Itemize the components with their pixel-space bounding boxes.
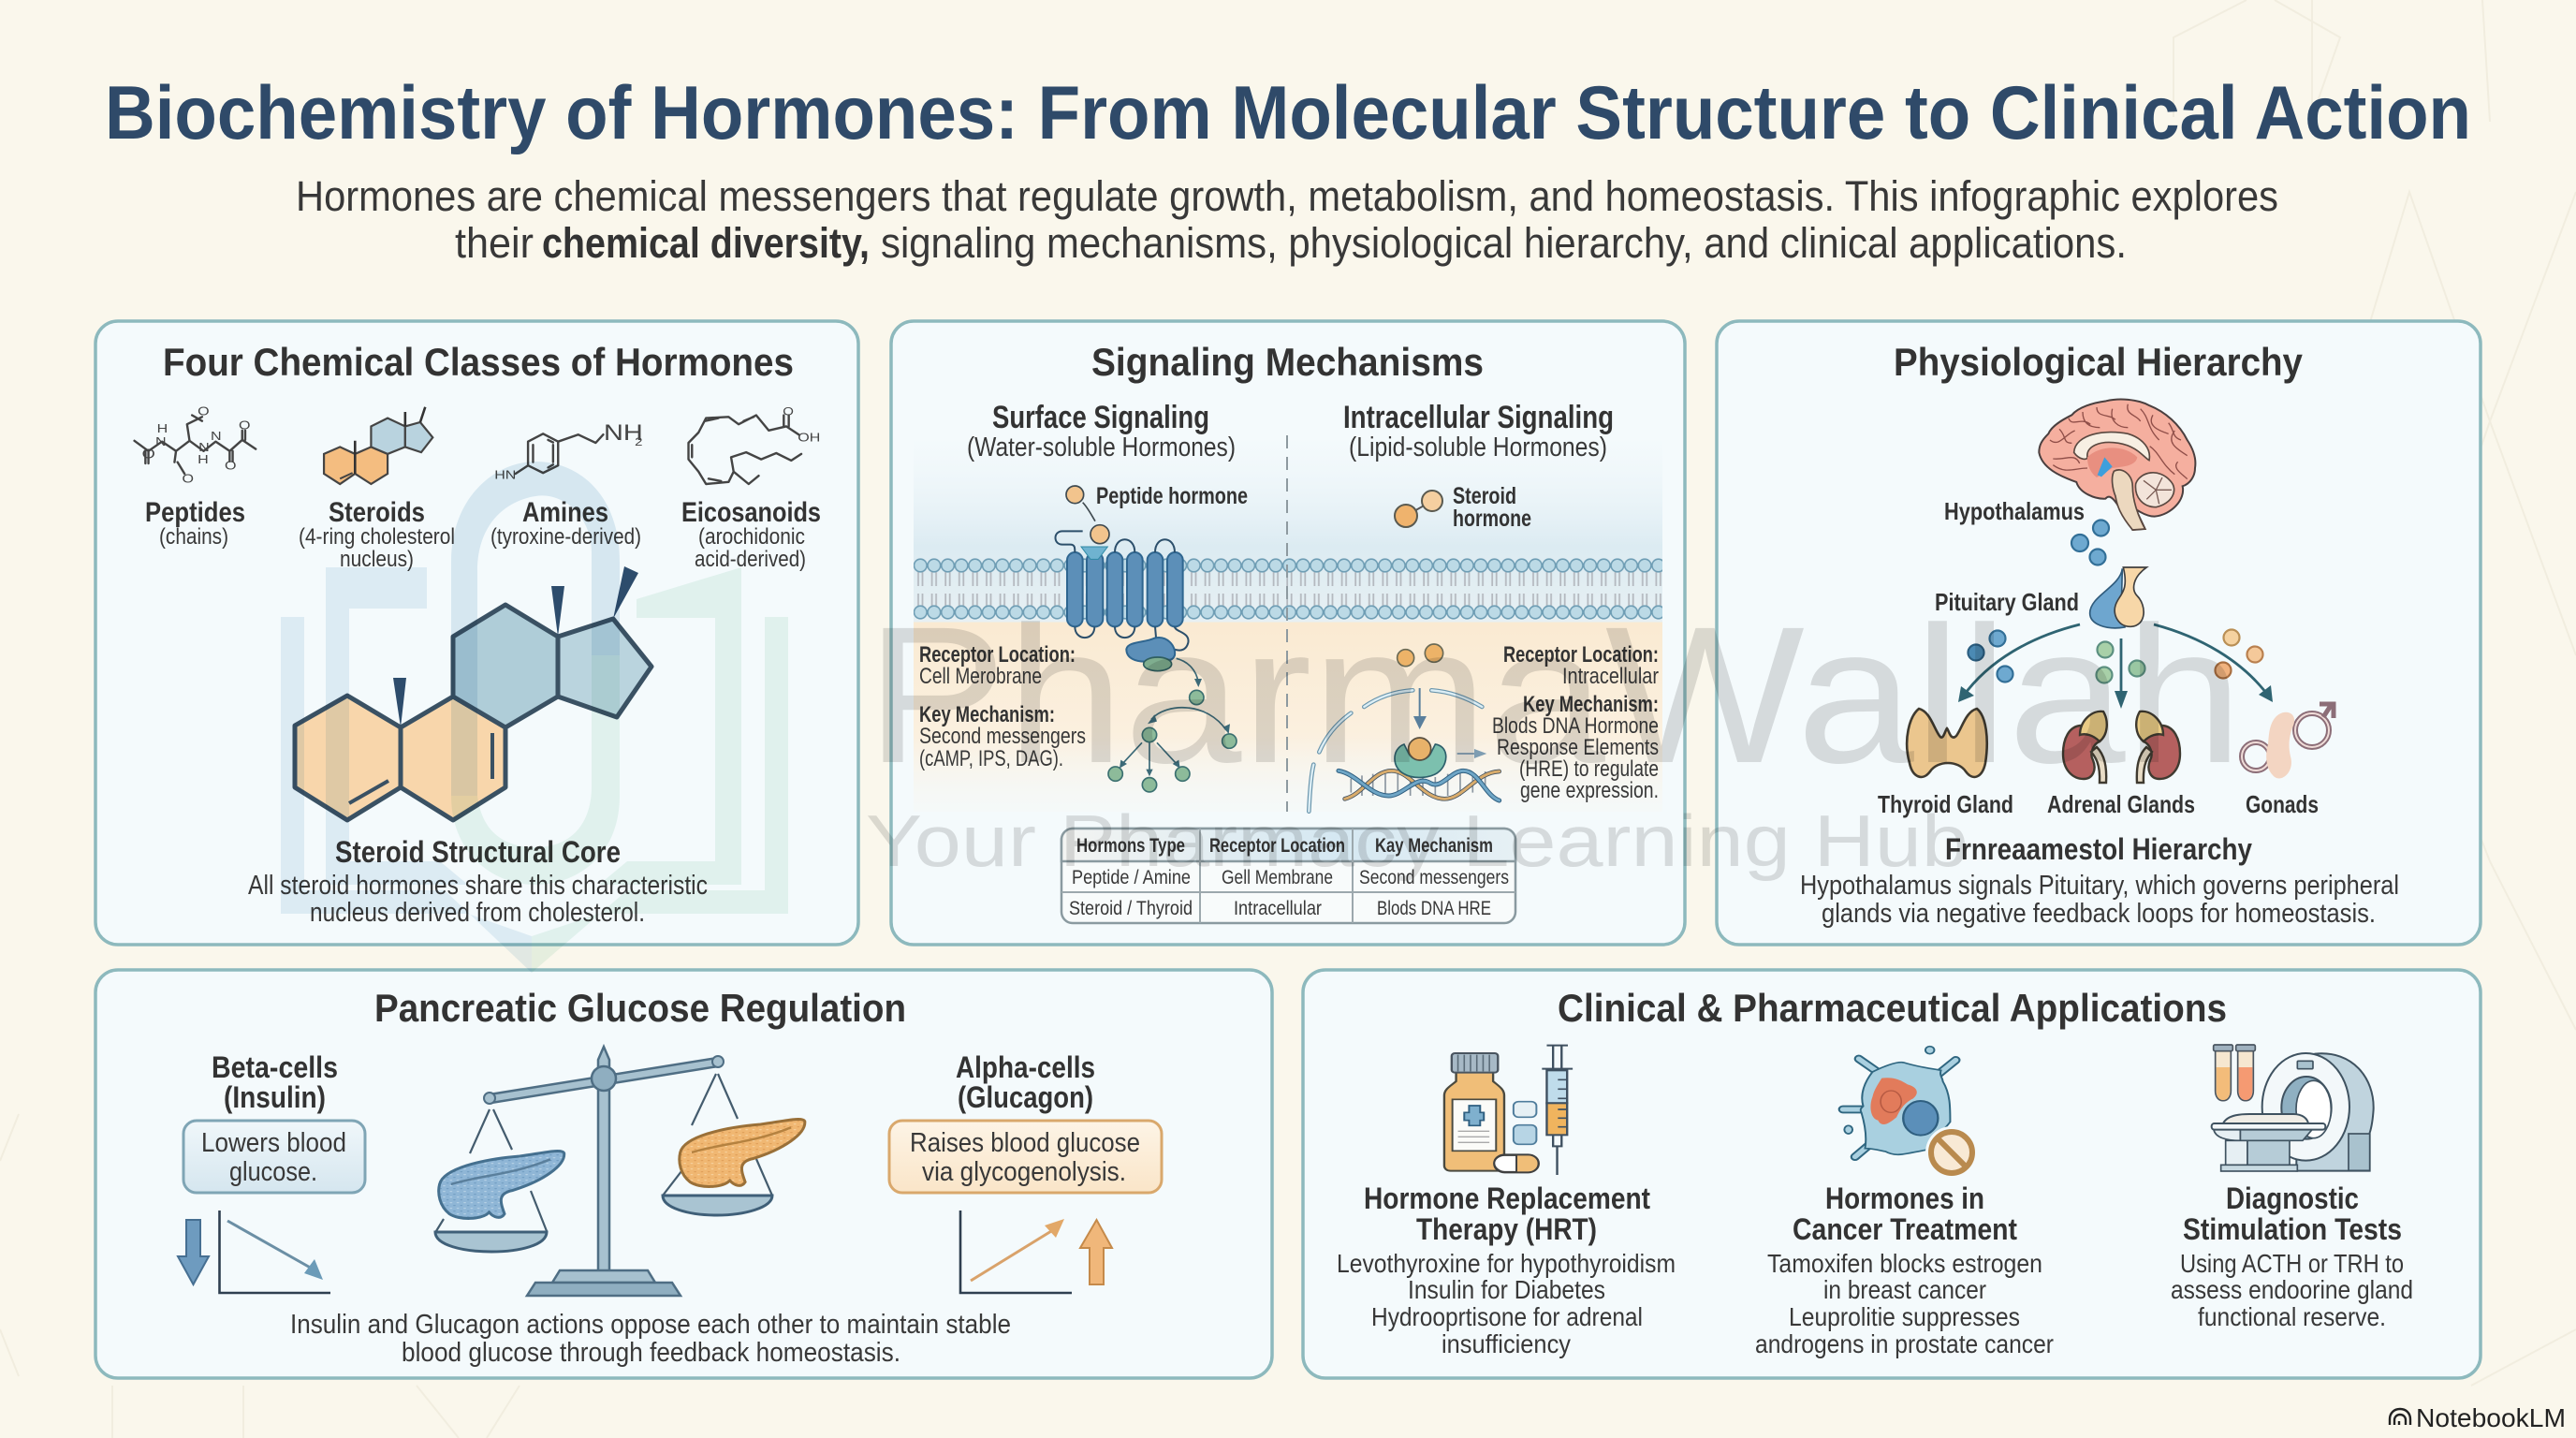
text: intracellular receptor notes: (HRE) to regulate <box>1519 756 1659 782</box>
hormone dots: hypothalamus <box>2071 521 2109 565</box>
cell background <box>914 433 1662 812</box>
labels: target glands: Adrenal Glands <box>2047 790 2195 818</box>
summary table: Second messengers <box>1359 867 1509 888</box>
panel: signaling mechanisms <box>891 321 1685 945</box>
column: diagnostic stimulation tests: assess endoorine gland <box>2171 1275 2413 1304</box>
column: diagnostic stimulation tests: Diagnostic <box>2226 1181 2359 1215</box>
panel: pancreatic glucose regulation <box>95 970 1272 1378</box>
subheading: intracellular signaling: (Lipid-soluble Hormones) <box>1349 433 1607 462</box>
icon: thyroid gland <box>1907 709 1987 777</box>
text: intracellular receptor notes <box>1492 642 1659 803</box>
column: hormone replacement therapy: Insulin for Diabetes <box>1408 1275 1605 1304</box>
text: surface receptor notes: (cAMP, IPS, DAG). <box>919 746 1063 771</box>
text: intracellular receptor notes: gene expression. <box>1520 778 1659 803</box>
icon: peptide molecule: O <box>225 460 236 473</box>
icon: amine molecule: NH <box>604 419 643 445</box>
column: hormones in cancer treatment: Leuprolitie suppresses <box>1789 1302 2020 1331</box>
panel: physiological hierarchy <box>1717 321 2481 945</box>
watermark: pharma wallah: PharmaWallah <box>866 587 2243 804</box>
icon: peptide molecule: N <box>198 441 210 454</box>
heading: four chemical classes: Four Chemical Classes of Hormones <box>163 340 794 384</box>
label: steroid hormone: hormone <box>1453 506 1531 532</box>
summary table: Peptide / Amine <box>1072 867 1191 888</box>
label: alpha-cells: Alpha-cells <box>956 1050 1095 1084</box>
icon: amine molecule <box>494 419 643 482</box>
summary table: Blods DNA HRE <box>1377 898 1491 919</box>
caption: steroid structural core: nucleus derived from cholesterol. <box>310 898 645 928</box>
caption: steroid structural core <box>248 835 708 928</box>
text: surface receptor notes: Key Mechanism: <box>919 702 1055 727</box>
text: intracellular receptor notes: Key Mechanism: <box>1523 692 1659 717</box>
caption: steroid structural core: Steroid Structural Core <box>335 835 621 869</box>
subheading: intracellular signaling: Intracellular Signaling <box>1343 400 1614 435</box>
label: alpha-cells <box>956 1050 1095 1114</box>
label: eicosanoids: acid-derived) <box>695 547 806 572</box>
icon: small steroid <box>324 407 432 484</box>
label: beta-cells: Beta-cells <box>212 1050 338 1084</box>
summary table: Intracellular <box>1234 898 1322 919</box>
icon: eicosanoid molecule <box>689 405 820 484</box>
label: eicosanoids <box>681 497 821 572</box>
icon: orange pancreas <box>680 1120 805 1186</box>
heading: clinical applications: Clinical & Pharmaceutical Applications <box>1558 986 2227 1030</box>
column: hormones in cancer treatment: Cancer Treatment <box>1793 1212 2017 1246</box>
heading: signaling mechanisms: Signaling Mechanisms <box>1091 340 1484 384</box>
icon: amine molecule: 2 <box>635 435 643 448</box>
icon: brain <box>2039 400 2195 530</box>
text: intracellular receptor notes: Receptor Location: <box>1503 642 1659 668</box>
column: diagnostic stimulation tests <box>2171 1181 2413 1331</box>
column: diagnostic stimulation tests: Stimulation Tests <box>2183 1212 2402 1246</box>
column: diagnostic stimulation tests: functional reserve. <box>2198 1302 2386 1331</box>
icon: eicosanoid molecule: OH <box>798 432 820 445</box>
hormone dots: glands <box>1968 629 2263 683</box>
labels: target glands: Thyroid Gland <box>1878 790 2013 818</box>
steroid nucleus diagram <box>295 566 651 820</box>
label: peptides: (chains) <box>159 524 228 550</box>
callout: lowers blood glucose: glucose. <box>229 1157 317 1187</box>
icon: peptide molecule: O <box>239 419 250 433</box>
chart: rising glucose <box>960 1211 1112 1293</box>
icon: peptide molecule: O <box>142 446 155 462</box>
icon: peptide molecule: O <box>182 473 194 486</box>
summary table <box>1061 829 1515 923</box>
column: hormones in cancer treatment: Hormones in <box>1825 1181 1984 1215</box>
label: peptide hormone: Peptide hormone <box>1096 483 1248 509</box>
intro text <box>296 172 2278 267</box>
heading: physiological hierarchy: Physiological Hierarchy <box>1894 340 2304 384</box>
balance scale <box>435 1047 772 1296</box>
callout: lowers blood glucose <box>183 1121 365 1193</box>
icon: blue pancreas <box>439 1152 564 1218</box>
summary table: Hormons Type <box>1076 835 1185 857</box>
chart: falling glucose <box>178 1211 330 1293</box>
text: intracellular receptor notes: Blods DNA Hormone <box>1492 713 1659 739</box>
watermark: book logo <box>281 462 788 973</box>
label: steroid hormone <box>1453 483 1531 532</box>
column: hormone replacement therapy: insufficiency <box>1442 1329 1571 1358</box>
caption: hierarchy: glands via negative feedback loops for homeostasis. <box>1822 899 2376 929</box>
icon: peptide molecule: N <box>211 430 222 444</box>
caption: opposing actions: Insulin and Glucagon actions oppose each other to maintain stable <box>290 1310 1011 1340</box>
text: surface receptor notes: Cell Merobrane <box>919 664 1042 689</box>
callout: raises blood glucose: Raises blood glucose <box>910 1128 1140 1158</box>
label: beta-cells: (Insulin) <box>224 1080 326 1114</box>
icon: peptide molecule: O <box>198 405 210 418</box>
label: peptides <box>145 497 245 550</box>
intro text: signaling mechanisms, physiological hierarchy, and clinical applications. <box>881 219 2127 267</box>
label: eicosanoids: (arochidonic <box>698 524 805 550</box>
label: steroids: Steroids <box>329 497 425 528</box>
label: beta-cells <box>212 1050 338 1114</box>
label: steroid hormone: Steroid <box>1453 483 1516 509</box>
intro text: their <box>455 219 534 267</box>
subheading: surface signaling: (Water-soluble Hormones) <box>967 433 1236 462</box>
icon: adrenal glands and kidneys <box>2063 712 2180 783</box>
icon: scanner and test tubes <box>2212 1045 2374 1171</box>
icon: pituitary gland <box>2090 567 2146 628</box>
column: hormone replacement therapy <box>1337 1181 1676 1358</box>
column: hormones in cancer treatment: in breast cancer <box>1823 1275 1986 1304</box>
subheading: surface signaling <box>967 400 1236 462</box>
summary table: Steroid / Thyroid <box>1069 898 1193 919</box>
label: steroids <box>299 497 455 572</box>
labels: target glands: Gonads <box>2246 790 2319 818</box>
panel: clinical applications <box>1303 970 2481 1378</box>
callout: raises blood glucose: via glycogenolysis. <box>922 1157 1126 1187</box>
subheading: intracellular signaling <box>1343 400 1614 462</box>
column: diagnostic stimulation tests: Using ACTH or TRH to <box>2180 1249 2404 1278</box>
labels: target glands <box>1878 790 2319 818</box>
text: surface receptor notes: Receptor Location: <box>919 642 1076 668</box>
intro text: chemical diversity, <box>542 219 870 267</box>
text: surface receptor notes: Second messengers <box>919 724 1086 749</box>
label: pituitary gland: Pituitary Gland <box>1935 588 2079 616</box>
callout: lowers blood glucose: Lowers blood <box>201 1128 346 1158</box>
panel: four chemical classes <box>95 321 858 945</box>
label: amines: Amines <box>522 497 608 528</box>
icon: peptide molecule: H <box>198 453 209 467</box>
label: eicosanoids: Eicosanoids <box>681 497 821 528</box>
notebooklm badge: NotebookLM <box>2416 1403 2566 1432</box>
icon: amine molecule: HN <box>494 469 516 482</box>
column: hormone replacement therapy: Hormone Replacement <box>1364 1181 1650 1215</box>
heading: pancreatic glucose regulation: Pancreatic Glucose Regulation <box>374 986 906 1030</box>
label: amines <box>490 497 641 550</box>
intro text: Hormones are chemical messengers that regulate growth, metabolism, and homeostasis. This infographic explores <box>296 172 2278 220</box>
icon: peptide molecule: H <box>157 422 168 436</box>
label: hypothalamus: Hypothalamus <box>1944 497 2085 525</box>
icon: steroid hormone <box>1395 491 1442 527</box>
column: hormone replacement therapy: Hydrooprtisone for adrenal <box>1371 1302 1643 1331</box>
column: hormones in cancer treatment: androgens in prostate cancer <box>1755 1329 2054 1358</box>
caption: hierarchy: Frnreaamestol Hierarchy <box>1945 832 2252 866</box>
icon: eicosanoid molecule: O <box>783 405 794 418</box>
column: hormone replacement therapy: Therapy (HRT) <box>1416 1212 1597 1246</box>
nuclear signaling diagram <box>1309 644 1500 812</box>
caption: steroid structural core: All steroid hormones share this characteristic <box>248 871 708 901</box>
text: surface receptor notes <box>919 642 1086 771</box>
icon: cancer cell with block symbol <box>1843 1047 1978 1179</box>
text: intracellular receptor notes: Response Elements <box>1497 735 1659 760</box>
receptor with signal cascade <box>1055 486 1237 792</box>
callout: raises blood glucose <box>889 1121 1162 1193</box>
summary table: Receptor Location <box>1209 835 1345 857</box>
column: hormones in cancer treatment: Tamoxifen blocks estrogen <box>1767 1249 2042 1278</box>
arrows: pituitary to glands <box>1958 624 2273 709</box>
divider <box>1286 435 1288 812</box>
label: steroids: (4-ring cholesterol <box>299 524 455 550</box>
label: peptides: Peptides <box>145 497 245 528</box>
label: amines: (tyroxine-derived) <box>490 524 641 550</box>
summary table: Gell Membrane <box>1222 867 1333 888</box>
summary table: Kay Mechanism <box>1375 835 1493 857</box>
caption: hierarchy: Hypothalamus signals Pituitary, which governs peripheral <box>1800 871 2399 901</box>
caption: opposing actions <box>290 1310 1011 1368</box>
icon: medication bottle and syringe <box>1444 1046 1573 1175</box>
cell membrane <box>914 557 1662 623</box>
icon: gonads <box>2242 704 2334 778</box>
watermark: tagline: Your Pharmacy Learning Hub <box>866 800 1969 882</box>
column: hormone replacement therapy: Levothyroxine for hypothyroidism <box>1337 1249 1676 1278</box>
label: steroids: nucleus) <box>340 547 414 572</box>
text: intracellular receptor notes: Intracellular <box>1562 664 1659 689</box>
caption: hierarchy <box>1800 832 2399 929</box>
icon: peptide molecule <box>135 405 256 486</box>
column: hormones in cancer treatment <box>1755 1181 2054 1358</box>
subheading: surface signaling: Surface Signaling <box>992 400 1209 435</box>
caption: opposing actions: blood glucose through feedback homeostasis. <box>402 1338 900 1368</box>
icon: peptide molecule: N <box>155 435 167 449</box>
label: alpha-cells: (Glucagon) <box>958 1080 1093 1114</box>
